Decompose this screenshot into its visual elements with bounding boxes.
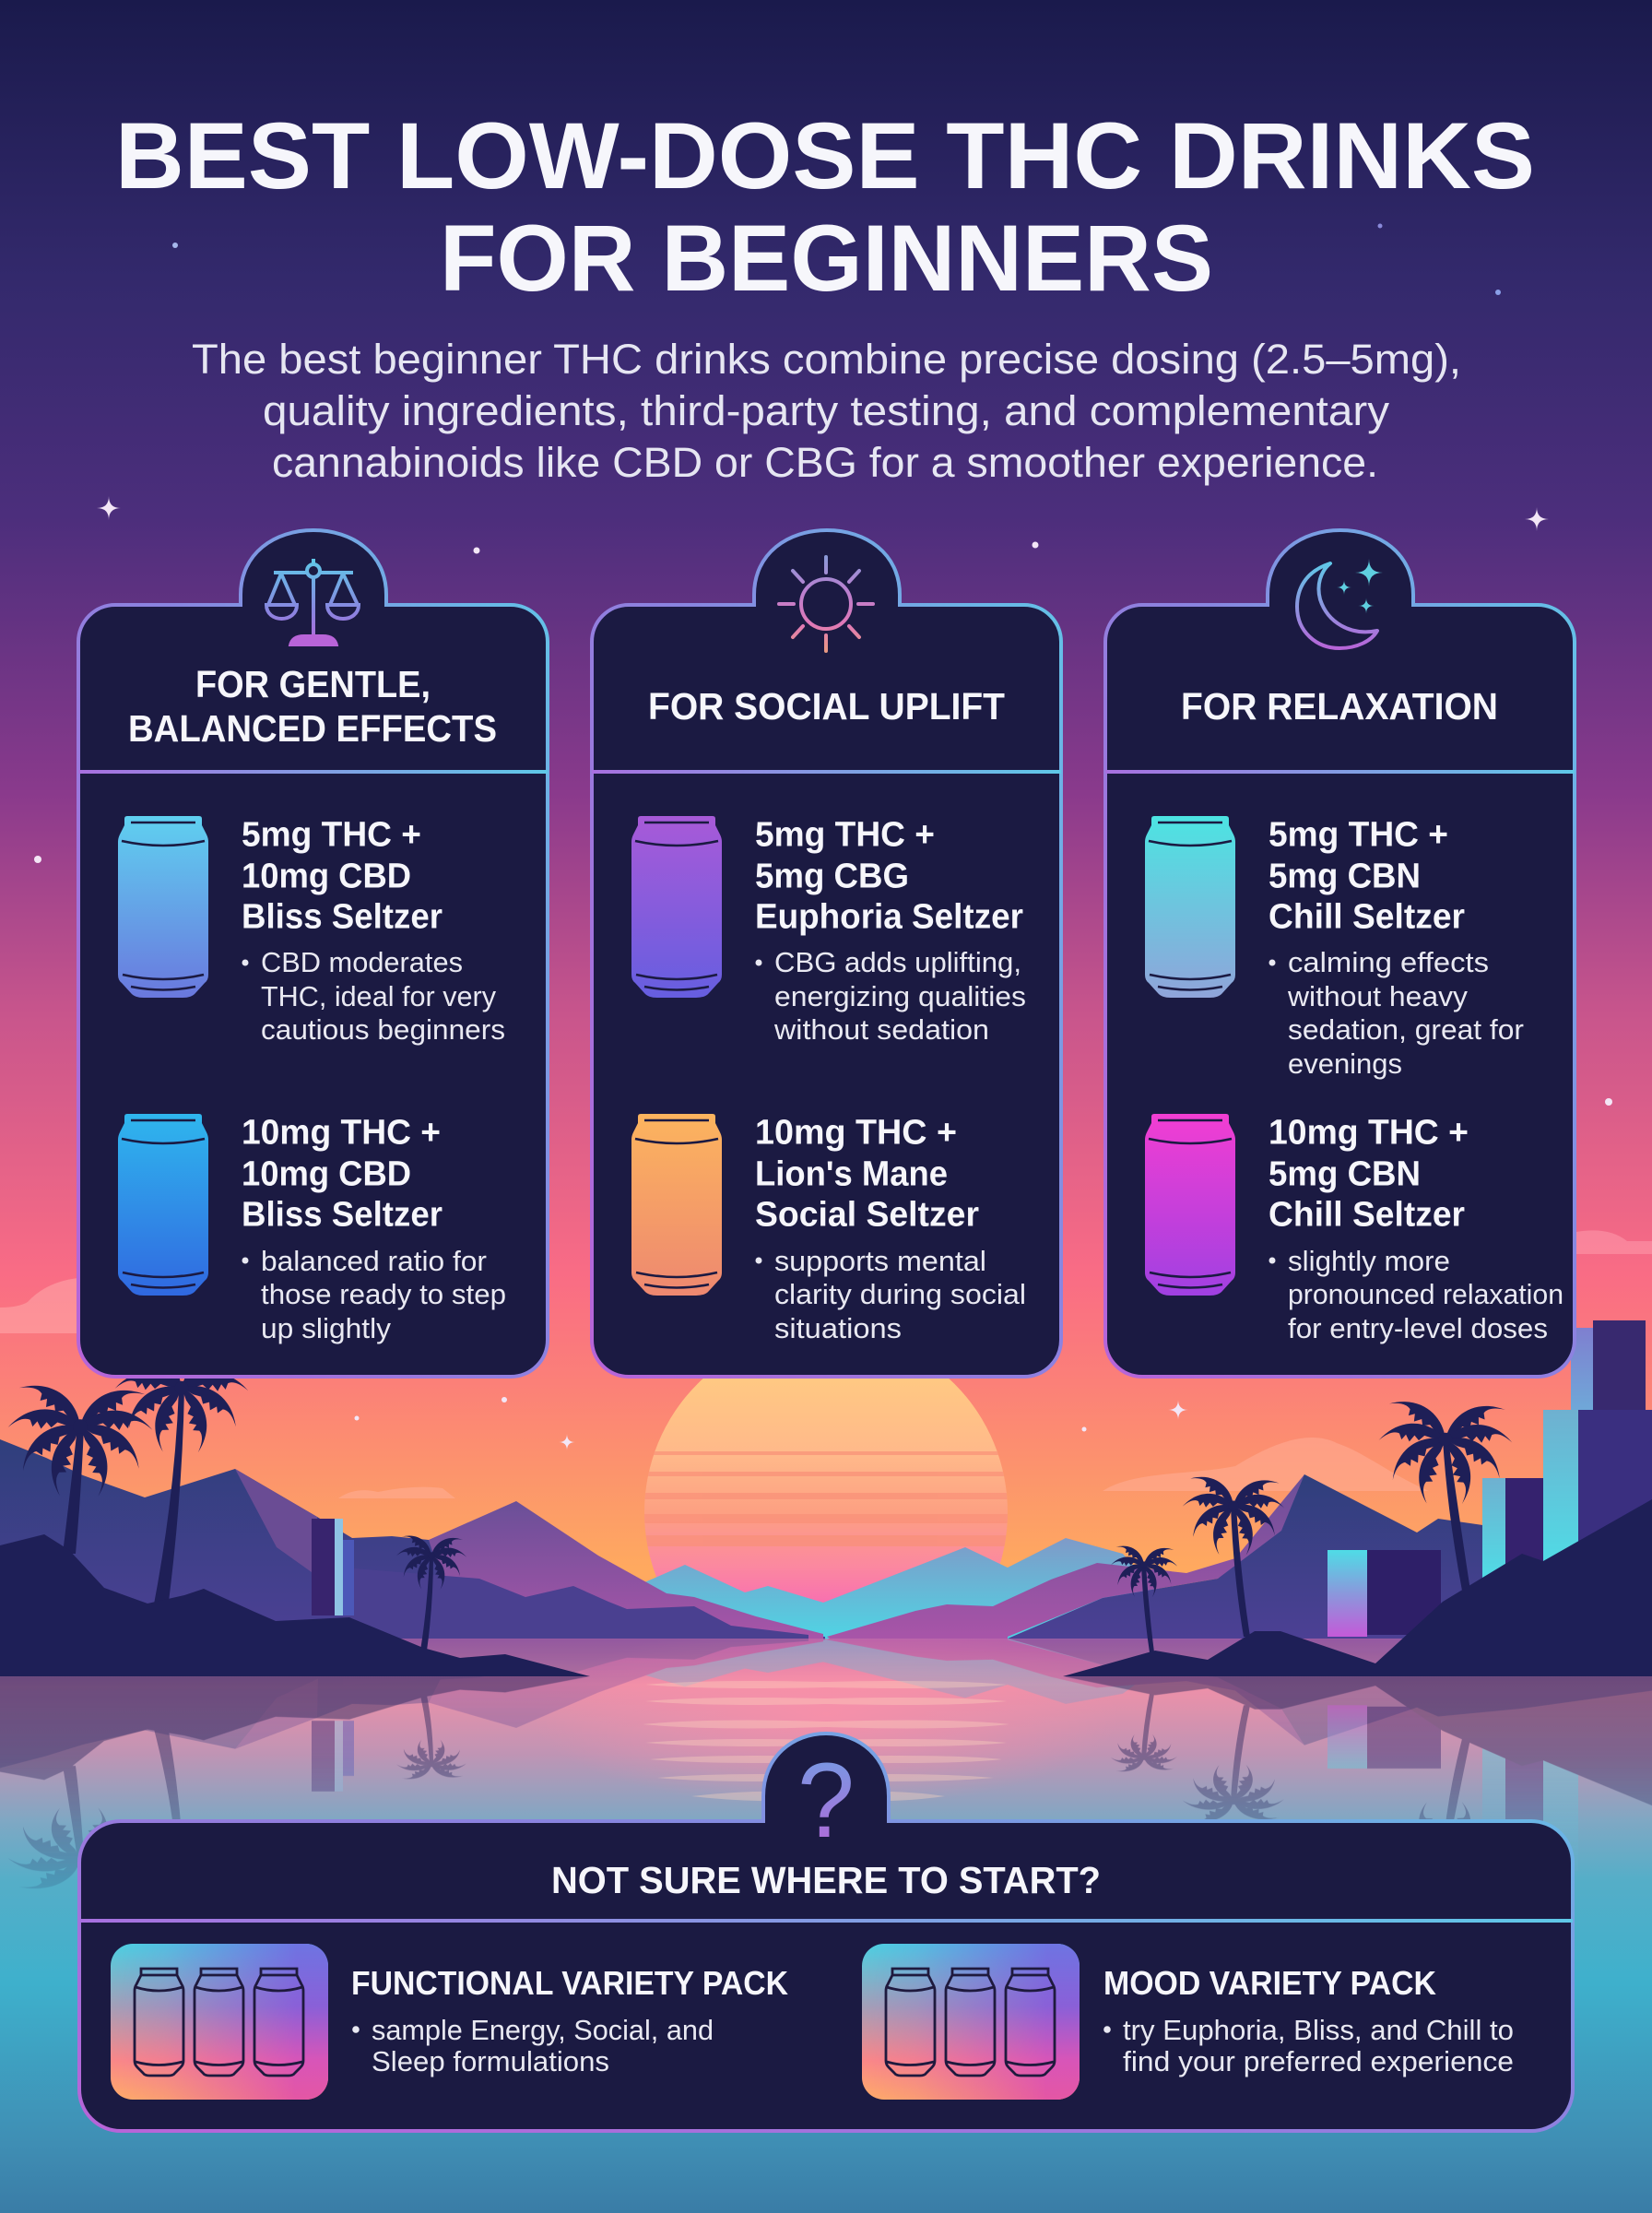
mood variety pack: MOOD VARIETY PACK [1103, 1964, 1436, 2002]
product: 10mg THC + Lion's Mane [755, 1114, 1026, 1344]
islands, palms and towers [0, 1336, 1652, 1676]
heading [128, 663, 497, 750]
product: 10mg THC + Lion's Mane: clarity during social [774, 1278, 1026, 1310]
product: 10mg THC + 10mg CBD [242, 1114, 506, 1344]
heading: NOT SURE WHERE TO START? [551, 1859, 1101, 1901]
product: 5mg THC + 5mg CBG: 5mg THC + [755, 815, 935, 854]
heading: FOR RELAXATION [1181, 685, 1498, 728]
panel: not sure where to start [79, 1734, 1573, 2131]
icon: balance scale [266, 559, 359, 645]
product: 10mg THC + 5mg CBN: slightly more [1288, 1245, 1450, 1277]
water reflections [0, 1639, 1652, 1924]
functional variety pack: Sleep formulations [372, 2045, 609, 2077]
icon: can [118, 1114, 208, 1296]
subtitle: cannabinoids like CBD or CBG for a smoother experience. [272, 439, 1378, 486]
icon: sun [779, 557, 873, 651]
product: 10mg THC + 5mg CBN: for entry-level doses [1288, 1312, 1548, 1344]
product: 5mg THC + 10mg CBD: CBD moderates [261, 946, 463, 978]
product: 10mg THC + 10mg CBD: up slightly [261, 1312, 392, 1344]
product: 5mg THC + 5mg CBG: CBG adds uplifting, [774, 946, 1021, 978]
stars [34, 223, 1612, 1450]
product: 5mg THC + 10mg CBD: Bliss Seltzer [242, 898, 442, 937]
product: 10mg THC + 5mg CBN: Chill Seltzer [1268, 1195, 1465, 1234]
product: 5mg THC + 10mg CBD: 5mg THC + [242, 815, 421, 854]
title: FOR BEGINNERS [440, 206, 1213, 311]
product: 10mg THC + 10mg CBD: balanced ratio for [261, 1245, 487, 1277]
functional variety pack: FUNCTIONAL VARIETY PACK [351, 1964, 788, 2002]
mountains [0, 1439, 1652, 1639]
product: 10mg THC + 10mg CBD: Bliss Seltzer [242, 1195, 442, 1234]
sun [644, 1379, 1008, 1603]
icon: moon and stars [1297, 559, 1383, 648]
product: 10mg THC + 10mg CBD: those ready to step [261, 1278, 506, 1310]
product: 5mg THC + 10mg CBD: 10mg CBD [242, 858, 411, 896]
product: 10mg THC + 10mg CBD: 10mg THC + [242, 1114, 441, 1153]
product: 5mg THC + 5mg CBN: evenings [1288, 1047, 1402, 1080]
panel: for relaxation [1105, 530, 1575, 1377]
product: 10mg THC + 5mg CBN: 10mg THC + [1268, 1114, 1469, 1153]
heading: FOR GENTLE, [195, 663, 431, 705]
product: 10mg THC + 5mg CBN: pronounced relaxation [1288, 1278, 1564, 1310]
product: 10mg THC + 5mg CBN: 5mg CBN [1268, 1154, 1421, 1193]
panel: for gentle, balanced effects [78, 530, 548, 1377]
panel: for social uplift [592, 530, 1061, 1377]
title [115, 103, 1535, 311]
mood variety pack: try Euphoria, Bliss, and Chill to [1123, 2014, 1514, 2046]
product: 10mg THC + Lion's Mane: Social Seltzer [755, 1195, 979, 1234]
product: 10mg THC + Lion's Mane: supports mental [774, 1245, 986, 1277]
icon: can [631, 816, 722, 998]
product: 5mg THC + 5mg CBN: sedation, great for [1288, 1013, 1524, 1046]
subtitle: quality ingredients, third-party testing, and complementary [263, 387, 1390, 434]
product: 10mg THC + Lion's Mane: situations [774, 1312, 902, 1344]
icon: can [1145, 1114, 1235, 1296]
product: 5mg THC + 5mg CBN [1268, 815, 1524, 1080]
product: 10mg THC + 10mg CBD: 10mg CBD [242, 1154, 411, 1193]
product: 10mg THC + Lion's Mane: 10mg THC + [755, 1114, 957, 1153]
icon: can [118, 816, 208, 998]
icon: can [631, 1114, 722, 1296]
heading: BALANCED EFFECTS [128, 707, 497, 750]
product: 5mg THC + 5mg CBN: Chill Seltzer [1268, 898, 1465, 937]
product: 5mg THC + 5mg CBN: 5mg THC + [1268, 815, 1448, 854]
icon: question mark: ? [797, 1742, 855, 1860]
icon: can [1145, 816, 1235, 998]
product: 10mg THC + 5mg CBN [1268, 1114, 1564, 1344]
product: 5mg THC + 5mg CBN: 5mg CBN [1268, 858, 1421, 896]
product: 5mg THC + 5mg CBG: energizing qualities [774, 980, 1026, 1012]
icon: variety pack tile [111, 1944, 328, 2100]
heading: FOR SOCIAL UPLIFT [648, 685, 1005, 728]
water [0, 1639, 1652, 2213]
title: BEST LOW-DOSE THC DRINKS [115, 103, 1535, 208]
clouds [0, 1230, 1652, 1498]
product: 5mg THC + 5mg CBN: without heavy [1287, 980, 1469, 1012]
product: 5mg THC + 5mg CBG: Euphoria Seltzer [755, 898, 1023, 937]
mood variety pack [1103, 1964, 1514, 2077]
icon: variety pack tile [862, 1944, 1080, 2100]
product: 5mg THC + 5mg CBN: calming effects [1288, 946, 1489, 978]
product: 5mg THC + 10mg CBD [242, 815, 505, 1046]
functional variety pack [351, 1964, 788, 2077]
product: 5mg THC + 5mg CBG: without sedation [773, 1013, 989, 1046]
product: 5mg THC + 5mg CBG: 5mg CBG [755, 858, 909, 896]
product: 10mg THC + Lion's Mane: Lion's Mane [755, 1154, 948, 1193]
functional variety pack: sample Energy, Social, and [372, 2014, 714, 2046]
mood variety pack: find your preferred experience [1123, 2045, 1514, 2077]
product: 5mg THC + 10mg CBD: THC, ideal for very [261, 980, 496, 1012]
subtitle: The best beginner THC drinks combine precise dosing (2.5–5mg), [192, 336, 1461, 383]
product: 5mg THC + 10mg CBD: cautious beginners [261, 1013, 505, 1046]
tall towers [1571, 1320, 1652, 1567]
sky gradient [0, 0, 1652, 1660]
product: 5mg THC + 5mg CBG [755, 815, 1026, 1046]
subtitle [192, 336, 1461, 486]
